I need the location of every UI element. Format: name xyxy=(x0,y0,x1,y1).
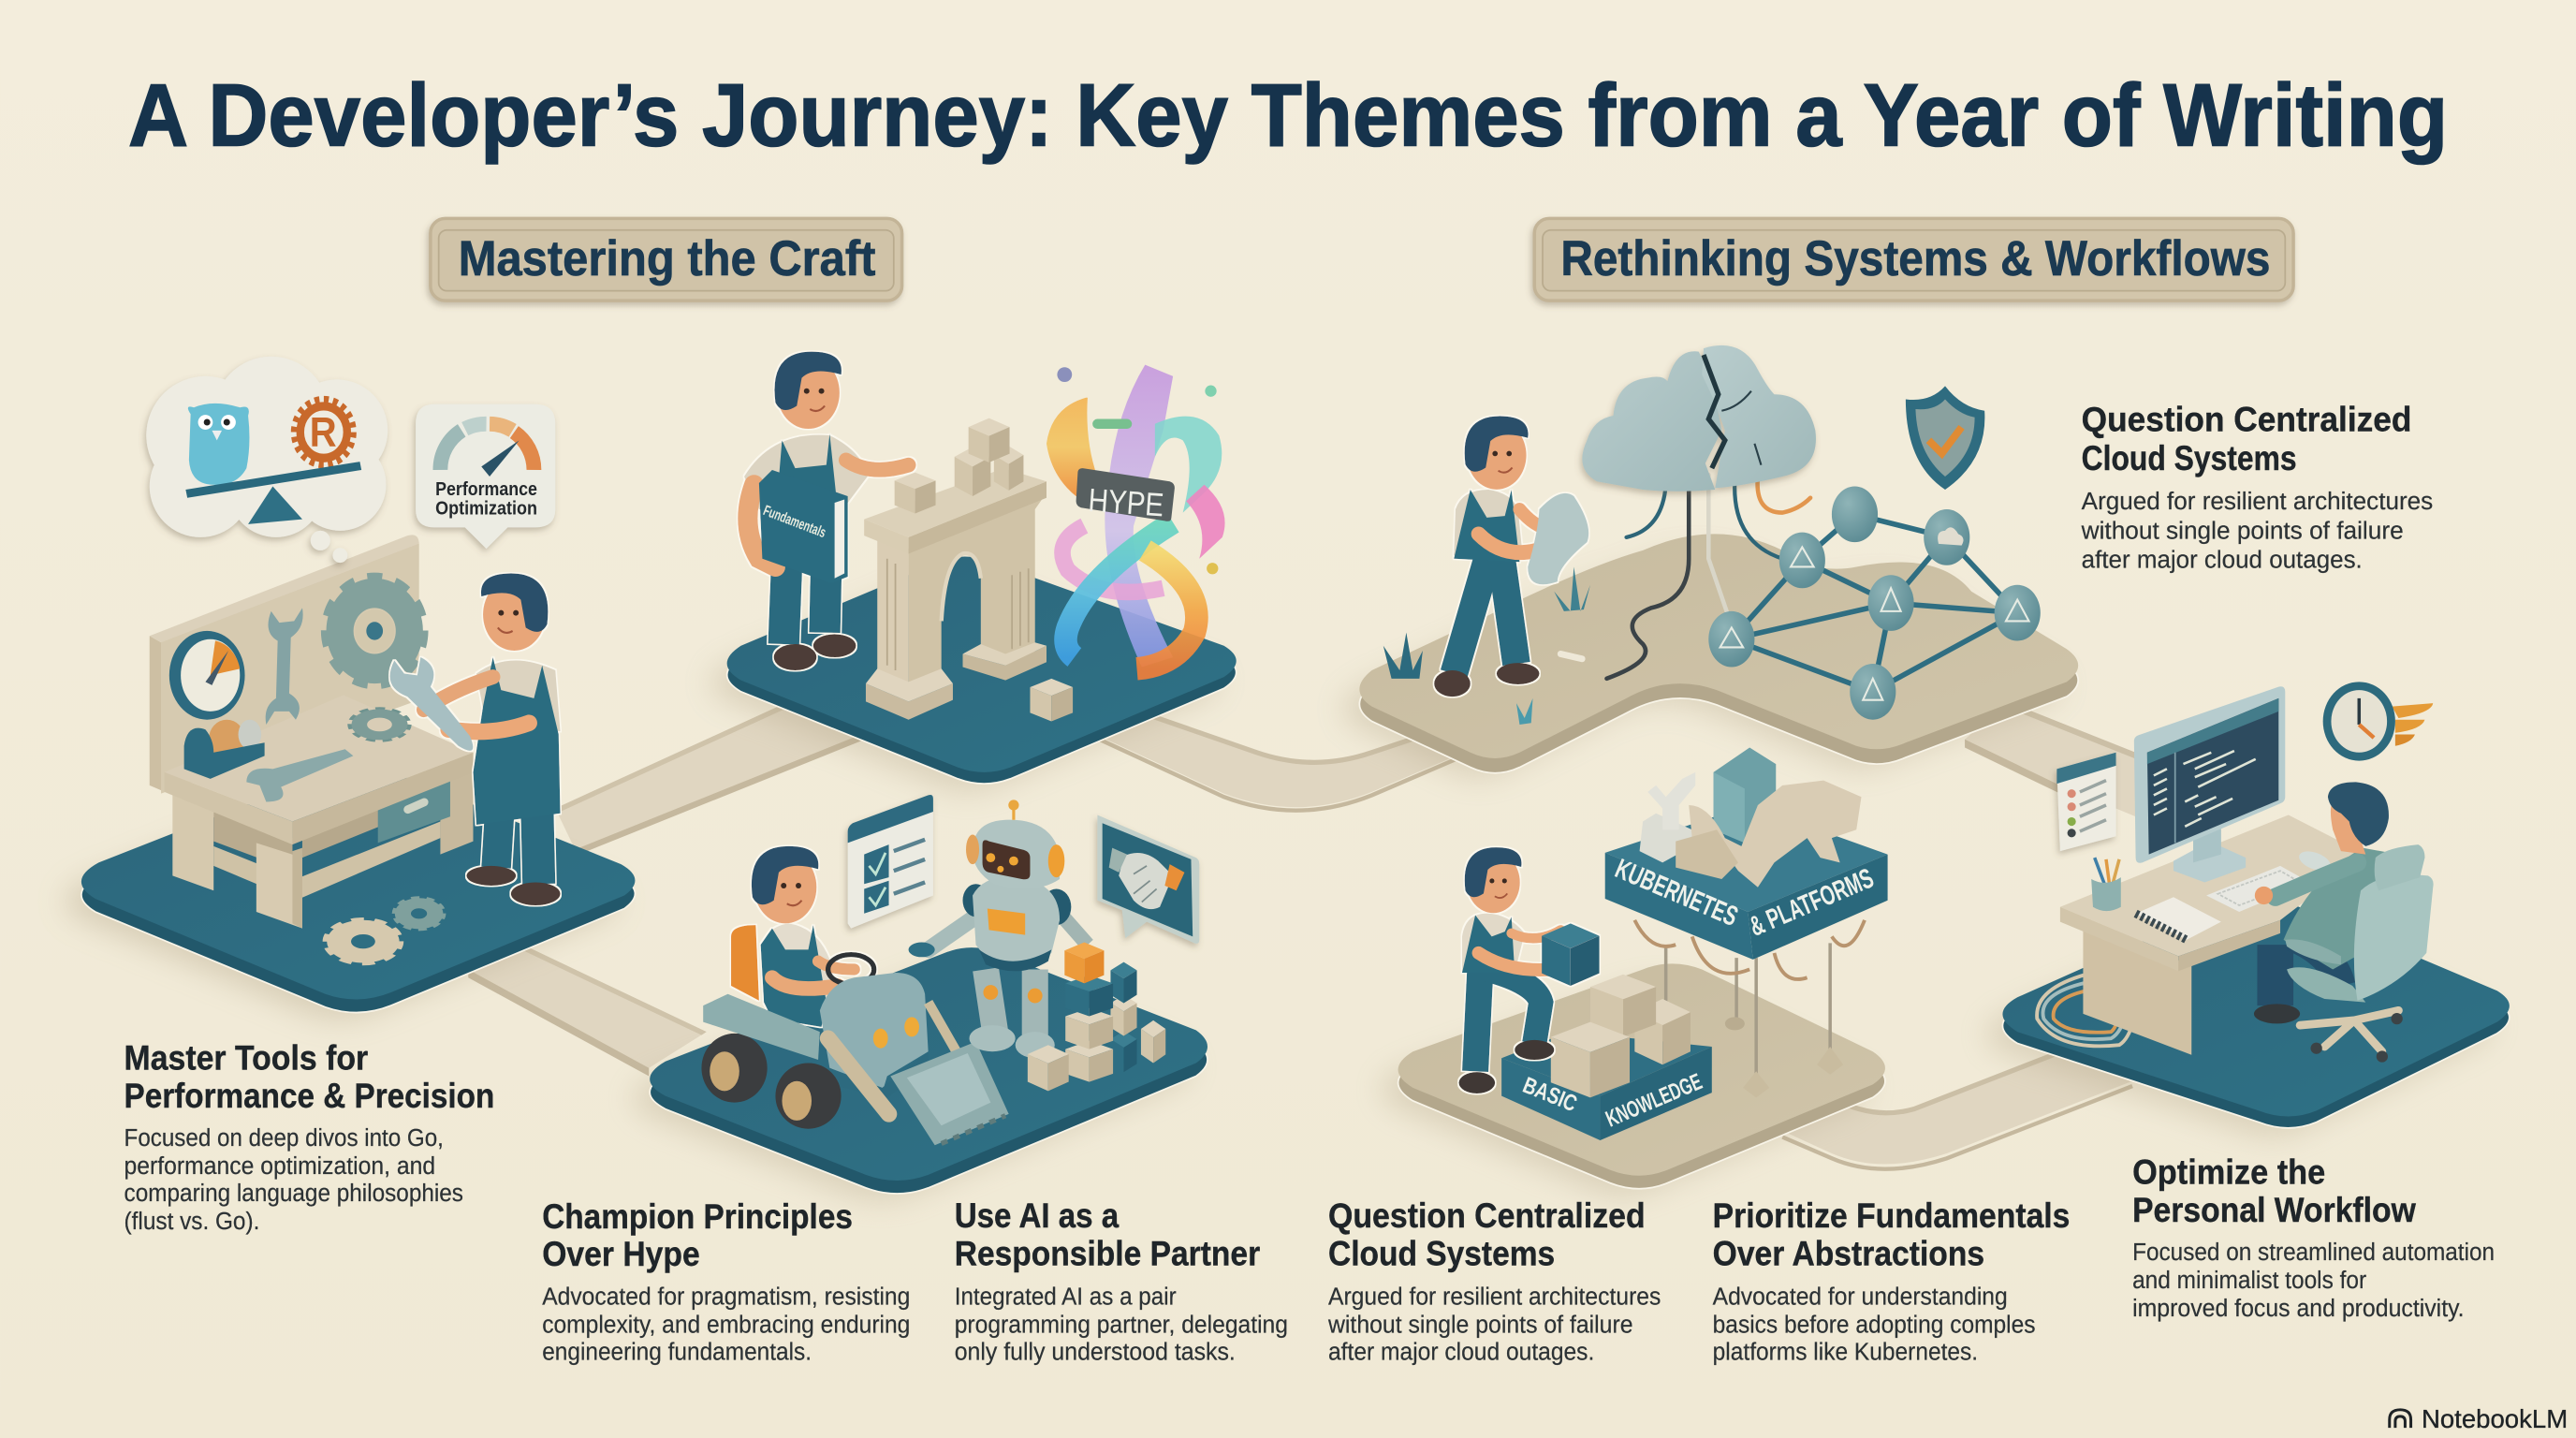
path: road from workbench to AI partner xyxy=(468,940,707,1077)
text block: Champion Principles: Over Hype xyxy=(542,1235,700,1273)
text block: Master Tools: Focused on deep divos into Go, xyxy=(124,1123,444,1152)
icon: Rust gear xyxy=(296,401,352,463)
icon: block stacks xyxy=(1028,943,1165,1091)
panel: arch and hype scene xyxy=(710,352,1237,792)
figure: developer with wrench xyxy=(390,574,561,905)
text block: Use AI: Responsible Partner xyxy=(955,1234,1260,1272)
section heading: Mastering the Craft xyxy=(431,218,902,301)
icon: fast clock xyxy=(2323,682,2433,761)
label block: Basic Knowledge: BASIC xyxy=(1519,1073,1581,1117)
text block: Use AI: Integrated AI as a pair xyxy=(955,1282,1177,1310)
text block: Prioritize Fundamentals: basics before adopting comples xyxy=(1713,1310,2036,1338)
section heading: Mastering the Craft: Mastering the Craft xyxy=(459,231,875,286)
text block: Use AI: only fully understood tasks. xyxy=(955,1337,1236,1365)
path: road from foundations to desk xyxy=(1774,1049,2132,1169)
text block: Master Tools xyxy=(124,1039,494,1235)
text block: Question Centralized (lower): Cloud Systems xyxy=(1328,1234,1555,1272)
text block: Question Centralized (upper): Argued for resilient architectures xyxy=(2082,487,2433,515)
label block: Kubernetes & Platforms: KUBERNETES xyxy=(1611,853,1742,932)
text block: Use AI: programming partner, delegating xyxy=(955,1310,1288,1338)
label: HYPE: HYPE xyxy=(1087,482,1165,523)
workbench xyxy=(150,535,474,929)
text block: Use AI xyxy=(955,1196,1288,1365)
text block: Champion Principles: Champion Principles xyxy=(542,1197,853,1236)
section heading: Rethinking Systems & Workflows: Rethinking Systems & Workflows xyxy=(1560,231,2271,286)
icon: robot xyxy=(909,800,1088,1058)
text block: Question Centralized (upper): Cloud Systems xyxy=(2082,439,2297,477)
label block: Basic Knowledge xyxy=(1501,1032,1712,1140)
icon: thin platform legs and cables xyxy=(1634,920,1865,1097)
icon: grass tufts xyxy=(1383,566,1590,725)
text block: Master Tools: Master Tools for xyxy=(124,1039,368,1078)
icon: Rust gear: R xyxy=(310,408,337,455)
panel: personal workflow scene xyxy=(1986,682,2510,1137)
icon: tape dispenser xyxy=(184,720,265,779)
icon: book: Fundamentals xyxy=(761,503,828,541)
text block: Champion Principles: complexity, and embracing enduring xyxy=(542,1310,910,1338)
icon: desk cables xyxy=(2037,953,2138,1046)
panel: fundamentals versus abstractions scene xyxy=(1382,748,1888,1196)
text block: Prioritize Fundamentals xyxy=(1713,1196,2070,1365)
icon: cracked cloud xyxy=(1582,345,1816,492)
icon: handshake speech panel xyxy=(1097,814,1199,944)
icon: cables from cloud xyxy=(1560,475,1810,679)
text block: Optimize the Personal Workflow: Personal Workflow xyxy=(2132,1191,2416,1229)
text block: Prioritize Fundamentals: Over Abstractions xyxy=(1713,1234,1984,1272)
path: road from cloud to desk xyxy=(1965,701,2144,816)
icon: book xyxy=(759,470,848,583)
platform xyxy=(1343,534,2078,778)
icon: keyboard and mouse xyxy=(2206,847,2333,912)
icon: pen cup xyxy=(2091,858,2121,911)
icon: wrench on bench xyxy=(246,749,353,801)
figure: developer holding fundamentals book xyxy=(744,352,909,670)
icon: wrench on pegboard xyxy=(266,608,303,725)
text block: Question Centralized (upper): without single points of failure xyxy=(2081,517,2404,545)
icon: complex abstraction shapes xyxy=(1640,748,1862,888)
text block: Prioritize Fundamentals: Prioritize Fundamentals xyxy=(1713,1196,2070,1235)
text block: Question Centralized (lower): after major cloud outages. xyxy=(1328,1337,1594,1365)
panel: workbench scene xyxy=(65,357,635,1020)
text block: Optimize the Personal Workflow: and minimalist tools for xyxy=(2132,1266,2366,1294)
text block: Master Tools: (flust vs. Go). xyxy=(124,1207,259,1235)
label block: Kubernetes & Platforms xyxy=(1605,805,1888,960)
icon: shield with check xyxy=(1906,386,1984,490)
icon: desk xyxy=(2060,814,2365,1055)
figure: developer holding broken plug xyxy=(1434,416,1588,697)
path: road from arch to cloud xyxy=(1096,710,1486,811)
text block: Optimize the Personal Workflow: Optimize the xyxy=(2132,1152,2325,1191)
text block: Master Tools: performance optimization, and xyxy=(124,1152,435,1180)
label: HYPE xyxy=(1076,468,1175,523)
platform xyxy=(634,947,1208,1200)
icon: hype ribbons xyxy=(1046,365,1225,668)
text block: Prioritize Fundamentals: Advocated for understanding xyxy=(1713,1282,2008,1310)
icon: basic blocks xyxy=(1551,975,1690,1097)
text block: Optimize the Personal Workflow xyxy=(2132,1152,2495,1322)
path: road from workbench to arch xyxy=(555,703,861,856)
figure: developer at desk from behind xyxy=(2254,782,2398,1023)
text block: Prioritize Fundamentals: platforms like Kubernetes. xyxy=(1713,1337,1978,1365)
icon: resilient mesh network xyxy=(1708,486,2041,720)
icon: broken plug xyxy=(1528,493,1588,584)
title: A Developer’s Journey: Key Themes from a Year of Writing xyxy=(128,66,2448,165)
platform xyxy=(1382,963,1885,1196)
icon: monitor xyxy=(2134,686,2285,882)
text block: Question Centralized (upper) xyxy=(2081,401,2433,573)
icon: office chair xyxy=(2285,844,2434,1063)
icon: large gear xyxy=(329,581,420,681)
text block: Champion Principles: engineering fundamentals. xyxy=(542,1337,812,1365)
text block: Master Tools: comparing language philosophies xyxy=(124,1179,463,1207)
icon: Go gopher xyxy=(188,404,249,485)
icon: notebook xyxy=(2136,897,2221,940)
logo: NotebookLM: NotebookLM xyxy=(2422,1404,2568,1433)
icon: gauge on pegboard xyxy=(169,631,245,720)
text block: Optimize the Personal Workflow: improved focus and productivity. xyxy=(2132,1294,2465,1322)
text block: Master Tools: Performance & Precision xyxy=(124,1077,494,1115)
text block: Question Centralized (upper): Question Centralized xyxy=(2082,401,2411,439)
icon: small gear on bench xyxy=(353,710,406,739)
icon: floor gears xyxy=(330,900,441,961)
platform xyxy=(1986,895,2510,1137)
callout: Performance Optimization: Performance xyxy=(435,479,537,500)
icon: loader xyxy=(701,973,1009,1145)
icon: stone arch xyxy=(864,468,1046,720)
callout: thought bubble comparing Go and Rust xyxy=(146,357,388,563)
callout: Performance Optimization: Optimization xyxy=(435,498,537,519)
section heading: Rethinking Systems & Workflows xyxy=(1534,218,2293,301)
figure: developer driving loader xyxy=(731,846,874,1027)
text block: Question Centralized (lower): Question Centralized xyxy=(1328,1196,1646,1235)
panel: broken cloud and mesh scene xyxy=(1343,345,2078,778)
icon: stone blocks xyxy=(895,418,1073,721)
text block: Optimize the Personal Workflow: Focused on streamlined automation xyxy=(2132,1238,2495,1266)
label block: Kubernetes & Platforms: & PLATFORMS xyxy=(1745,863,1878,943)
text block: Question Centralized (lower): without single points of failure xyxy=(1327,1310,1633,1338)
label block: Basic Knowledge: KNOWLEDGE xyxy=(1603,1069,1705,1132)
panel: AI partner scene xyxy=(634,795,1208,1200)
platform xyxy=(65,764,635,1020)
text block: Champion Principles: Advocated for pragmatism, resisting xyxy=(542,1282,910,1310)
platform xyxy=(710,556,1237,792)
text block: Question Centralized (lower): Argued for resilient architectures xyxy=(1328,1282,1661,1310)
text block: Question Centralized (lower) xyxy=(1327,1196,1661,1365)
callout: Performance Optimization xyxy=(416,404,555,549)
text block: Champion Principles xyxy=(542,1197,910,1365)
text block: Use AI: Use AI as a xyxy=(955,1196,1120,1235)
icon: floating task list xyxy=(2056,753,2116,851)
figure: developer placing a block xyxy=(1459,847,1600,1093)
icon: seesaw xyxy=(185,462,361,524)
text block: Question Centralized (upper): after major cloud outages. xyxy=(2082,545,2363,573)
icon: checklist panel xyxy=(848,795,933,929)
